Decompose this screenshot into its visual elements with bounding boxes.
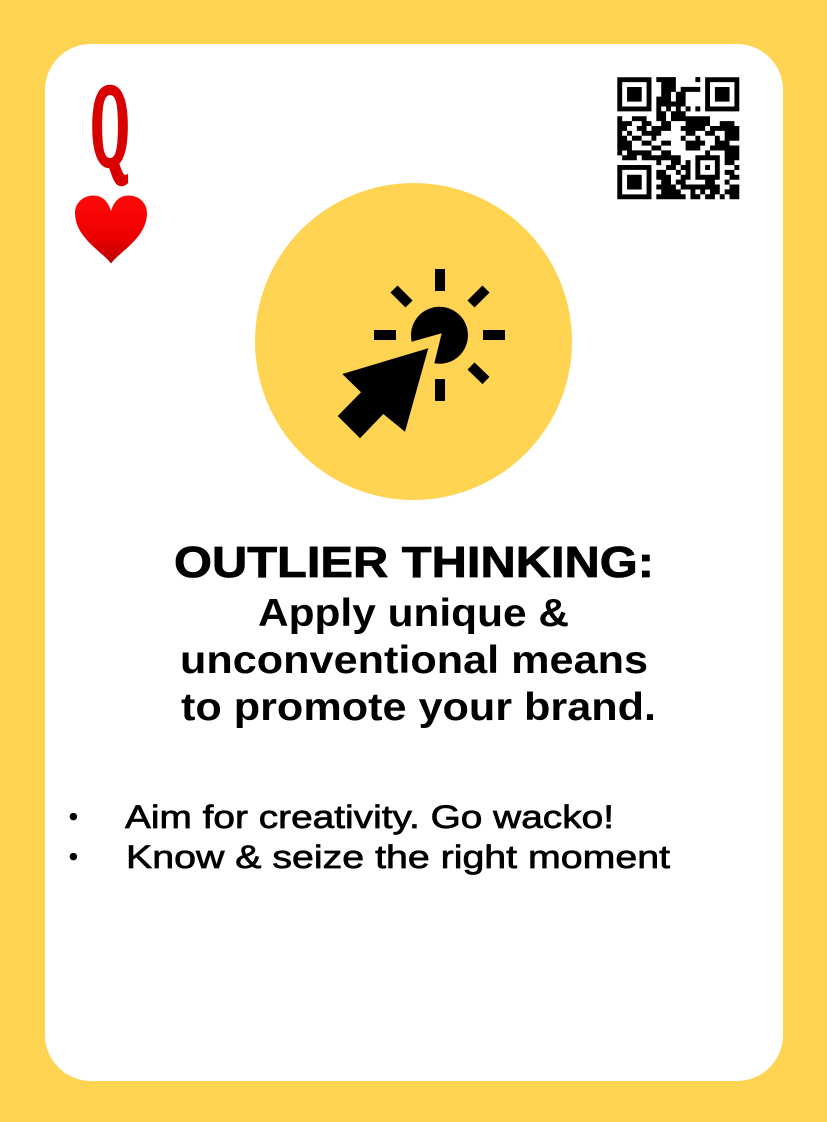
subtitle text block: unconventional means — [180, 639, 648, 682]
bullet list: Aim for creativity. Go wacko! — [125, 799, 614, 835]
card rank: letter Q: Q — [91, 59, 129, 191]
bullet list — [69, 799, 670, 875]
bullet list: • — [69, 803, 78, 831]
bullet list: Know & seize the right moment — [126, 839, 670, 875]
yellow circle badge with click icon — [255, 183, 572, 500]
subtitle text block: Apply unique & — [258, 592, 569, 635]
QR code — [617, 80, 739, 197]
title: OUTLIER THINKING: — [174, 538, 654, 587]
subtitle text block: to promote your brand. — [181, 686, 656, 729]
icon: red heart suit — [75, 196, 147, 264]
bullet list: • — [69, 843, 78, 871]
subtitle text block — [180, 592, 656, 729]
icon: cursor clicking with burst — [338, 269, 505, 438]
